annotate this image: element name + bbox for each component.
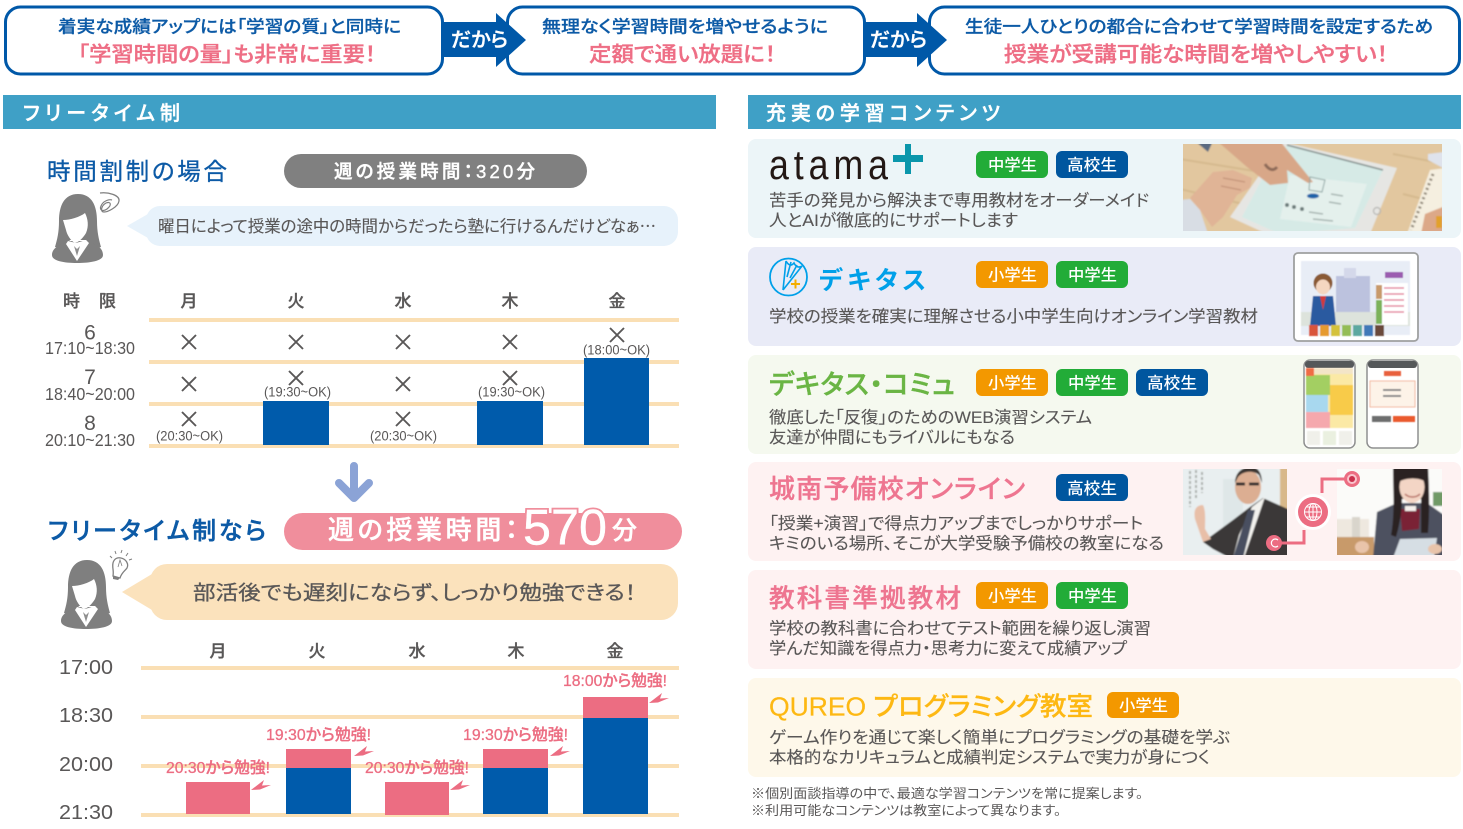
badges: 中学生 [1068,266,1117,284]
chart day header: 木 [508,642,524,661]
OK time notes: (19:30~OK) [478,384,545,400]
footnotes: ※利用可能なコンテンツは教室によって異なります。 [751,803,1061,818]
bar: 木 [483,749,548,814]
icon: worried student [52,193,119,263]
title: 城南予備校オンライン [769,474,1025,504]
top message box 2: 定額で通い放題に！ [589,44,776,66]
description [769,619,1151,658]
logo: デキタス [770,258,926,296]
panel: 城南予備校オンライン [748,462,1461,561]
top message box 1 [6,7,442,74]
description [769,514,1164,553]
period labels: 8 [84,412,96,435]
arrow: だから 2 [864,13,947,67]
panel: デキタス・コミュ [748,355,1461,454]
title: デキタス・コミュ [769,370,955,400]
speech bubble: 曜日によって [127,206,678,246]
heading: フリータイム制なら: フリータイム制なら [48,518,266,545]
study start labels: 20:30から勉強! [365,758,469,777]
description: キミのいる場所、そこが大学受験予備校の教室になる [769,534,1164,553]
top message box 2 [508,7,864,74]
pill: 週の授業時間 570分: 週の授業時間： [328,515,518,545]
pill: 週の授業時間 570分 [284,500,682,556]
top message box 2: 無理なく学習時間を増やせるように [542,18,828,36]
OK time notes: (19:30~OK) [264,384,331,400]
badges: 中学生 [1068,374,1117,392]
section header: フリータイム制 [3,95,716,129]
description [769,191,1149,230]
bar: 水 [385,782,449,815]
timetable header row [63,292,626,311]
logo: atama+: atama [769,142,888,189]
OK time notes [156,342,650,444]
description: 友達が仲間にもライバルにもなる [769,428,1015,447]
title: QUREO プログラミング教室 [769,692,1093,722]
bar: 火 [286,749,351,814]
emphasis ticks [251,693,669,790]
title: 教科書準拠教材 [769,585,961,613]
period labels [45,322,135,450]
study start labels: 19:30から勉強! [463,725,568,744]
chart day header: 金 [606,642,624,661]
period labels: 20:10~21:30 [45,430,135,450]
study start labels: 19:30から勉強! [266,725,371,744]
timetable header row: 火 [288,292,304,311]
speech bubble: 部活後でも: 部活後でも遅刻にならず、しっかり勉強できる！ [193,582,636,604]
chart day header: 水 [408,642,426,661]
badges [976,582,1128,609]
description: 徹底した「反復」のためのWEB演習システム [769,408,1092,427]
badge [1107,692,1179,718]
timetable header row: 水 [394,292,412,311]
timetable [45,292,679,450]
period labels: 6 [84,322,96,344]
badge: 小学生 [1119,697,1168,715]
badges [976,151,1128,178]
description: 苦手の発見から解決まで専用教材をオーダーメイド [769,191,1149,210]
OK time notes: (20:30~OK) [370,428,437,444]
photo: tablet [1183,144,1442,231]
description: 本格的なカリキュラムと成績判定システムで実力が身につく [769,748,1210,767]
top message box 3: 生徒一人ひとりの都合に合わせて学習時間を設定するため [965,18,1433,36]
footnotes [751,786,1143,818]
period labels: 17:10~18:30 [45,338,135,358]
image: tablet screen [1294,253,1418,341]
blue available bars [263,358,649,445]
pill: 週の授業時間 570分: 570 [523,500,607,556]
pill: 週の授業時間 320分 [284,154,587,188]
OK time notes: (20:30~OK) [156,428,223,444]
footnotes: ※個別面談指導の中で、最適な学習コンテンツを常に提案します。 [751,786,1143,801]
timetable header row: 時 [63,292,80,311]
description [769,408,1092,447]
photo: teacher [1183,469,1287,555]
badges [976,261,1128,288]
badge [1056,474,1128,501]
study start labels: 20:30から勉強! [166,758,270,777]
timetable header row: 限 [99,292,116,311]
panel: 教科書準拠教材 [748,570,1461,669]
heading: 時間割制の場合: 時間割制の場合 [47,158,227,184]
badges: 高校生 [1147,374,1197,392]
badges: 中学生 [1068,588,1117,606]
description: 学校の教科書に合わせてテスト範囲を繰り返し演習 [769,619,1151,638]
bar: 金 [583,697,648,814]
badges: 中学生 [988,156,1037,174]
top message box 1: 着実な成績アップには「学習の質」と同時に [58,18,401,36]
chart day header [210,642,624,661]
photo: student [1337,469,1442,555]
badges [976,369,1208,396]
pill: 週の授業時間 320分: 週の授業時間：320分 [334,161,535,182]
section header: 充実の学習コンテンツ: 充実の学習コンテンツ [766,102,1000,125]
top message box 1: 「学習時間の量」も非常に重要！ [78,44,376,66]
badge: 高校生 [1067,480,1117,498]
timetable header row: 木 [502,292,518,311]
image: phones [1304,360,1418,448]
pill: 週の授業時間 570分: 570 [523,500,607,556]
logo: デキタス: デキタス [819,266,926,295]
arrow: down [339,466,369,498]
pill: 週の授業時間 570分: 分 [612,517,637,545]
description [769,728,1230,767]
speech bubble: 部活後でも [122,564,678,620]
study time chart [59,642,679,824]
study start labels [166,671,667,777]
chart time labels: 20:00 [59,753,113,776]
top message box 3: 授業が受講可能な時間を増やしやすい！ [1004,44,1388,66]
OK time notes: (18:00~OK) [583,342,650,358]
arrow: だから 1 [443,13,526,67]
panel: QUREO [748,678,1461,777]
icon: student with idea [61,550,132,629]
icon: online connection [1266,471,1360,551]
period labels: 7 [84,366,96,389]
panel: デキタス [748,247,1461,346]
section header: フリータイム制: フリータイム制 [23,102,180,125]
chart time labels [59,656,113,824]
description: 学んだ知識を得点力・思考力に変えて成績アップ [769,639,1128,658]
chart time labels: 21:30 [59,801,113,824]
badges: 小学生 [988,588,1037,606]
bar: 月 [186,782,250,814]
arrow: だから 2: だから [870,30,927,52]
study start labels: 18:00から勉強! [563,671,667,690]
badges: 小学生 [988,374,1037,392]
badges: 高校生 [1067,156,1117,174]
top message box 3 [930,7,1460,74]
timetable header row: 月 [180,292,198,311]
timetable header row: 金 [608,292,626,311]
description: 人とAIが徹底的にサポートします [769,211,1018,230]
chart day header: 火 [308,642,326,661]
chart time labels: 18:30 [59,704,113,727]
panel: atama+ [748,139,1461,238]
description: 学校の授業を確実に理解させる小中学生向けオンライン学習教材 [769,307,1258,326]
description: 「授業+演習」で得点力アップまでしっかりサポート [769,514,1143,533]
badges: 小学生 [988,266,1037,284]
cross marks [182,328,624,426]
description: ゲーム作りを通じて楽しく簡単にプログラミングの基礎を学ぶ [769,728,1230,747]
speech bubble: 曜日によって: 曜日によって授業の途中の時間からだったら塾に行けるんだけどなぁ… [158,213,656,237]
section header: 充実の学習コンテンツ [748,95,1461,129]
chart time labels: 17:00 [59,656,113,679]
chart day header: 月 [210,642,226,661]
arrow: だから 1: だから [451,30,508,52]
period labels: 18:40~20:00 [45,384,135,404]
